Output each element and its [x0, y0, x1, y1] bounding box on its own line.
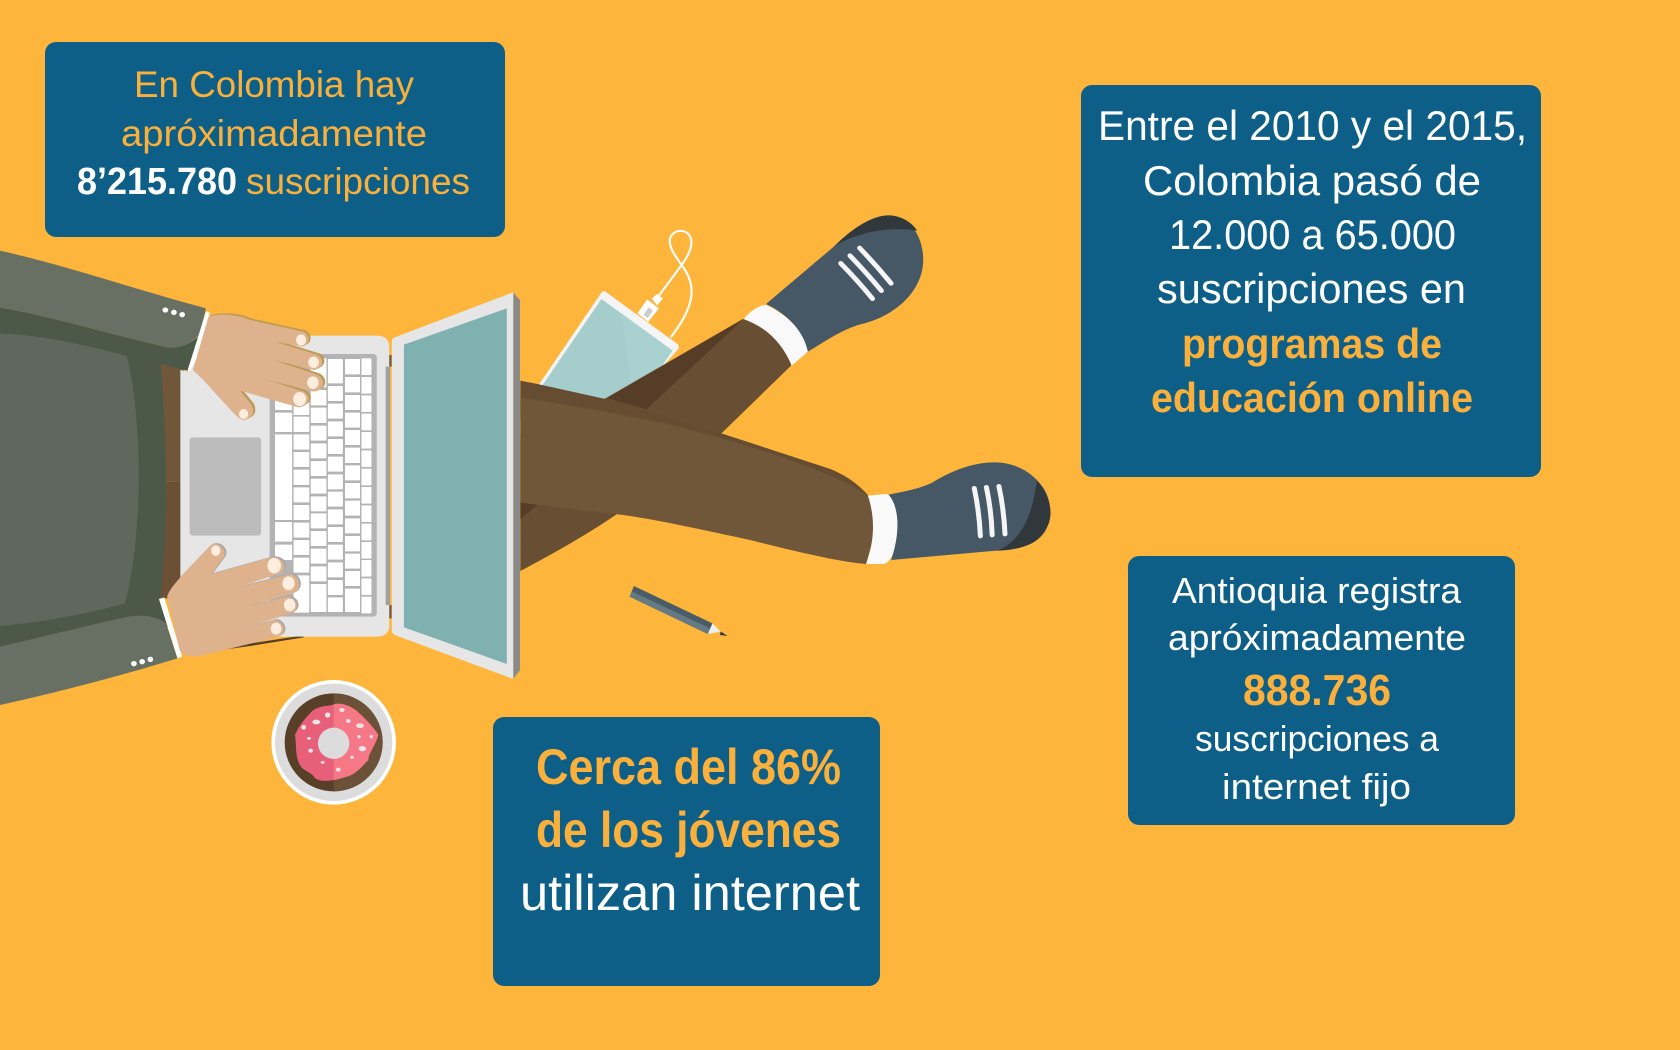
front leg cuff: [866, 494, 898, 564]
back sock: [766, 215, 923, 352]
illustration: legs, socks, phone and pencil: [520, 215, 1050, 636]
panel: jóvenes: Cerca del 86%: [536, 739, 841, 795]
panel: Antioquia: internet fijo: [1222, 766, 1411, 807]
panel: educación online: educación online: [1151, 374, 1473, 421]
lap behind laptop: [159, 362, 304, 650]
panel: jóvenes: de los jóvenes: [536, 802, 841, 858]
laptop screen: [392, 292, 520, 679]
panel: suscripciones Colombia: suscripciones: [246, 161, 470, 202]
jacket body: [0, 307, 200, 657]
icon: phone with cable: [537, 231, 692, 403]
panel: suscripciones Colombia: [45, 42, 505, 237]
trackpad: [190, 437, 261, 536]
icon: donut on plate: [271, 680, 396, 805]
hand: bottom: [167, 543, 301, 656]
laptop base: [180, 336, 389, 637]
panel: educación online: suscripciones en: [1157, 265, 1466, 312]
bottom sleeve: [0, 597, 182, 705]
panel: educación online: Colombia pasó de: [1143, 157, 1481, 204]
panel: suscripciones Colombia: 8’215.780: [77, 161, 237, 203]
panel: suscripciones Colombia: En Colombia hay: [134, 64, 414, 105]
panel: Antioquia: Antioquia registra: [1172, 570, 1462, 611]
panel: Antioquia: [1128, 556, 1515, 825]
front leg trousers: [520, 381, 879, 564]
panel: jóvenes: [493, 717, 880, 986]
panel: jóvenes: utilizan internet: [520, 865, 860, 921]
panel: educación online: programas de: [1182, 320, 1442, 367]
laptop hinge: [386, 355, 392, 618]
front sock: [889, 462, 1050, 560]
back leg trousers: [520, 319, 791, 571]
panel: Antioquia: suscripciones a: [1195, 718, 1440, 759]
top sleeve: [0, 251, 210, 373]
keyboard: [270, 354, 377, 617]
panel: educación online: 12.000 a 65.000: [1169, 211, 1456, 258]
panel: educación online: [1081, 85, 1541, 477]
panel: suscripciones Colombia: apróximadamente: [121, 113, 427, 154]
panel: Antioquia: apróximadamente: [1168, 617, 1466, 658]
back leg cuff: [744, 305, 808, 366]
illustration: person with laptop: [0, 251, 520, 705]
panel: educación online: Entre el 2010 y el 2015,: [1098, 102, 1527, 149]
icon: pencil: [630, 586, 727, 636]
hand: top: [193, 313, 325, 420]
panel: Antioquia: 888.736: [1243, 666, 1391, 715]
